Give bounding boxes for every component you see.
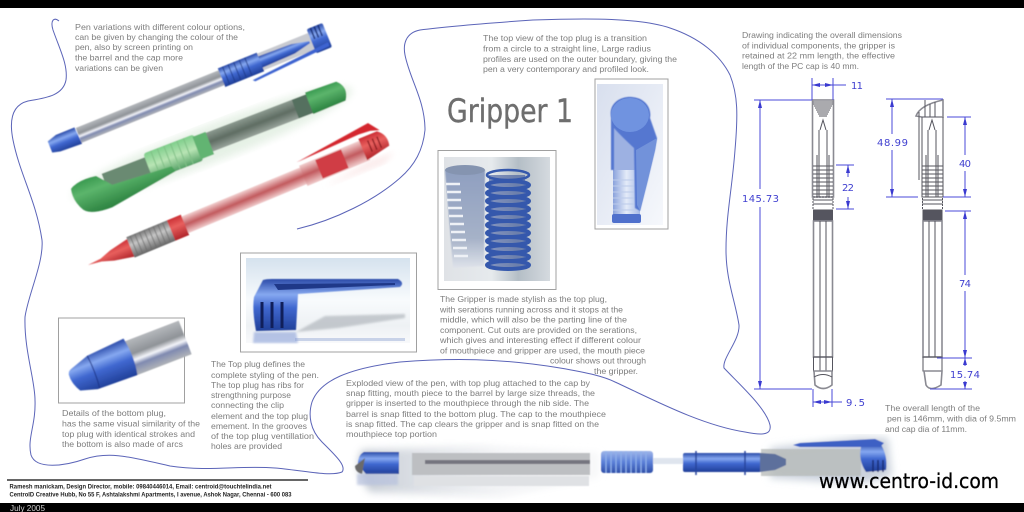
text: gripper: which gives and interesting effect if different colour (439, 335, 641, 345)
text: top plug: holes are provided (211, 441, 282, 451)
text: top plug: The top plug has ribs for (211, 380, 304, 390)
text: top plug: element and the top plug (211, 411, 308, 421)
footer rule and contact: CentroID Creative Hubb, No 55 F, Ashtalakshmi Apartments, I avenue, Ashok Nagar, Chennai - 600 083 (10, 492, 292, 498)
label: 48.99: 48.99 (877, 138, 908, 149)
text: pen variations: can be given by changing the colour of the (75, 32, 238, 42)
text: top view: pen a very contemporary and profiled look. (483, 64, 649, 74)
text: pen variations (75, 22, 245, 73)
heading: Gripper 1: Gripper 1 (447, 92, 573, 130)
text: dimensions note: length of the PC cap is 40 mm. (742, 61, 859, 71)
text: exploded view: gripper is inserted to the mouthpiece through the nib side. The (346, 398, 589, 408)
text: top plug (211, 359, 319, 451)
text: pen variations: variations can be given (75, 63, 163, 73)
dimensions: front view (742, 78, 865, 409)
text: top plug: strengthning purpose (211, 390, 291, 400)
text: top plug: The Top plug defines the (211, 359, 305, 369)
label: 15.74: 15.74 (950, 370, 980, 381)
text: exploded view (346, 378, 606, 439)
text: top plug: complete styling of the pen. (211, 370, 319, 380)
text: bottom plug: has the same visual similarity of the (62, 418, 200, 428)
text: gripper: with serations running across and it stops at the (439, 304, 623, 314)
text: pen variations: the barrel and the cap more (75, 52, 183, 62)
text: bottom plug (62, 408, 200, 449)
label: 9.5: 9.5 (846, 398, 865, 409)
clip (793, 439, 884, 447)
text: gripper: of mouthpiece and gripper are used, the mouth piece (440, 346, 645, 356)
label: 40: 40 (959, 159, 971, 170)
text: bottom plug: the bottom is also made of arcs (62, 439, 183, 449)
text: bottom plug: Details of the bottom plug, (62, 408, 166, 418)
text: exploded view: Exploded view of the pen, with top plug attached to the cap by (346, 378, 591, 388)
text: exploded view: snap fitting, mouth piece to the barrel by large size threads, the (346, 388, 595, 398)
text: dimensions note: Drawing indicating the overall dimensions (742, 30, 902, 40)
text: exploded view: is snap fitted. The cap clears the gripper and is snap fitted on the (346, 419, 599, 429)
text: bottom plug: top plug with identical strokes and (62, 429, 195, 439)
text: top view: The top view of the top plug is a transition (483, 33, 647, 43)
image frame: gripper (438, 150, 556, 290)
text: top view: from a circle to a straight line, Large radius (483, 44, 651, 54)
website url: www.centro-id.com (819, 469, 999, 493)
top black band (0, 0, 1024, 8)
gripper rings (487, 170, 529, 269)
text: overall length (885, 403, 1016, 434)
text: overall length: The overall length of the (885, 403, 980, 413)
bottom plug (358, 452, 399, 474)
gripper (601, 451, 653, 473)
text: top view: profiles are used on the outer boundary, giving the (483, 54, 677, 64)
barrel (412, 453, 590, 475)
green top plug and clip (69, 148, 180, 219)
clear cap (761, 449, 861, 476)
text: exploded view: barrel is snap fitted to the bottom plug. The cap to the mouthpiece (346, 409, 606, 419)
label: 74: 74 (959, 279, 971, 290)
text: top plug: connecting the clip (211, 400, 284, 410)
label: 145.73: 145.73 (742, 194, 779, 205)
exploded pen (355, 437, 892, 497)
footer rule and contact: Ramesh manickam, Design Director, mobile: 09840446014, Email: centroid@touchtelindia.net (10, 484, 272, 490)
top plug (860, 443, 886, 472)
text: dimensions note: retained at 22 mm length, the effective (742, 50, 895, 60)
footer rule and contact (7, 479, 308, 498)
text: pen variations: Pen variations with different colour options, (75, 22, 245, 32)
flowing outline curve (11, 19, 770, 474)
connector (653, 458, 683, 464)
text: gripper (439, 294, 646, 376)
text: pen variations: pen, also by screen printing on (75, 42, 193, 52)
text: dimensions note (742, 30, 902, 71)
image frame: top plug (240, 253, 416, 352)
text: gripper: colour shows out through (550, 356, 646, 366)
text: overall length: pen is 146mm, with dia of 9.5mm (887, 414, 1016, 424)
text: gripper: component. Cut outs are provided on the serations, (440, 325, 637, 335)
text: gripper: the gripper. (594, 366, 638, 376)
text: top plug: of the top plug ventillation (211, 431, 314, 441)
text: overall length: and cap dia of 11mm. (885, 424, 967, 434)
dimensions: side view (877, 99, 980, 389)
green pen (65, 72, 361, 219)
label: 22: 22 (842, 183, 854, 194)
red pen (79, 118, 397, 283)
bottom black band with date (0, 503, 1024, 512)
text: dimensions note: of individual components, the gripper is (742, 40, 895, 50)
image frame: bottom plug (58, 318, 192, 403)
text: top plug: emement. In the grooves (211, 421, 307, 431)
label: 11: 11 (851, 81, 863, 92)
mouthpiece (683, 453, 761, 472)
top plug part (253, 279, 402, 331)
technical drawing: front view (812, 100, 834, 388)
blue pen (45, 23, 333, 162)
text: gripper: The Gripper is made stylish as the top plug, (440, 294, 607, 304)
text: top view (483, 33, 677, 74)
technical drawing: side view (916, 100, 943, 388)
text: gripper: middle, which will also be the parting line of the (440, 314, 627, 324)
image frame: top view (595, 79, 668, 229)
text: exploded view: mouthpiece top portion (346, 429, 437, 439)
